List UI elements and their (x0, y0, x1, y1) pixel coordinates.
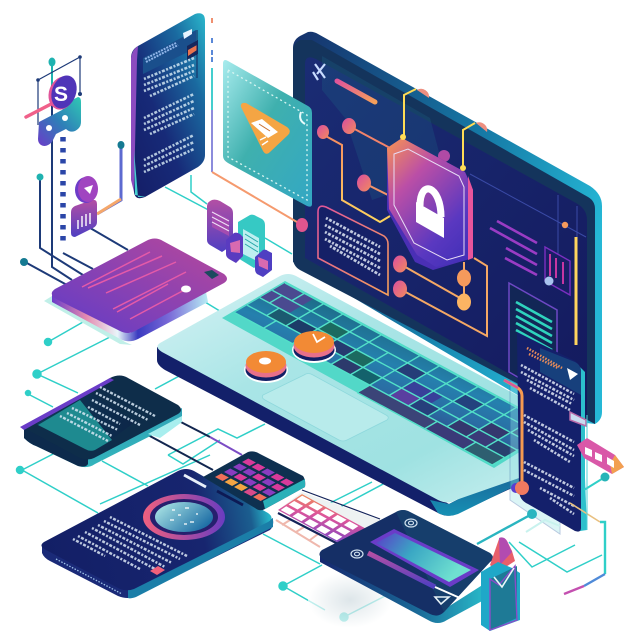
triangle icon (435, 597, 449, 604)
touchpad (262, 374, 388, 441)
wire frame (38, 57, 80, 125)
device top (319, 510, 493, 616)
calculator (203, 451, 305, 510)
device thickness (320, 553, 484, 623)
tablet text block two (144, 94, 194, 134)
top tablet (131, 13, 205, 198)
dark tablet top (24, 376, 181, 460)
document one (207, 200, 233, 252)
colour grid panel (276, 490, 380, 547)
connector lines: navy to cards (20, 65, 242, 470)
dark tablet side (24, 408, 182, 467)
phone body (517, 332, 581, 532)
purple card (44, 238, 227, 345)
base underside (157, 347, 525, 516)
phone text (527, 348, 562, 368)
purple list lines (490, 221, 537, 275)
keyboard (222, 281, 558, 468)
orange button one (244, 351, 288, 383)
speaker slit (184, 475, 206, 487)
phone side (579, 366, 587, 531)
card shadow tint (44, 296, 132, 345)
padlock icon (416, 189, 444, 238)
person icon (71, 141, 124, 237)
tablet edge (131, 13, 205, 198)
envelope triangle (241, 103, 290, 154)
right phone (504, 332, 600, 534)
right teal connectors (477, 415, 610, 594)
card top (52, 238, 227, 333)
bottom-right device (319, 510, 493, 623)
screen logo (313, 64, 325, 80)
connector dots (511, 483, 521, 493)
top-left app icon (26, 55, 82, 146)
pink bar (26, 102, 55, 117)
translucent panel (510, 380, 560, 534)
document four (255, 250, 272, 277)
device bar (368, 553, 435, 587)
orange dot on screen (562, 222, 568, 228)
document card on screen (509, 283, 557, 400)
puzzle base (38, 97, 81, 146)
card text lines (82, 252, 188, 319)
large device top (41, 469, 271, 590)
tower cone (490, 538, 515, 572)
soft shadow (308, 572, 392, 628)
tag buttons (585, 447, 614, 468)
tablet header strip (143, 30, 196, 74)
orange connector on phone (504, 380, 522, 482)
circuit dots (317, 118, 450, 298)
security tower (481, 537, 520, 631)
large device text (73, 517, 187, 569)
card dot and chip (181, 286, 191, 292)
device screen (370, 529, 479, 587)
screen bezel (293, 40, 595, 424)
dark tablet (20, 376, 182, 467)
dashed coloured connector and node (212, 18, 302, 225)
connector lines: teal network (16, 175, 602, 621)
tower body (481, 562, 520, 631)
document two (238, 215, 265, 268)
deck top (157, 274, 585, 502)
circuit nodes left (322, 126, 586, 345)
yellow circuit to shield (404, 89, 475, 168)
large device side (42, 520, 273, 598)
bars widget (544, 247, 570, 295)
round icons (351, 519, 417, 558)
upper grid (278, 494, 367, 545)
screen gloss (322, 56, 445, 200)
dark tablet text (60, 387, 155, 441)
small document stack (207, 200, 272, 277)
highlighted keys (222, 283, 555, 465)
tablet text block one (144, 58, 194, 96)
large bottom-left device (41, 469, 273, 598)
card thickness (52, 292, 208, 341)
orange button two (292, 331, 336, 363)
S badge: S (54, 83, 68, 106)
glass card (223, 60, 312, 207)
purple edge (20, 378, 114, 430)
screen outer shell (293, 32, 602, 424)
calculator keys (215, 458, 294, 501)
dotted vertical line (60, 137, 66, 247)
laptop base (157, 274, 585, 516)
menu pill (337, 81, 375, 102)
tablet text block three (144, 135, 194, 172)
lens ring (143, 494, 225, 540)
screen display (305, 57, 587, 418)
screen text panel (318, 206, 388, 295)
security shield with padlock (387, 134, 473, 270)
pink circuit dot (296, 218, 308, 232)
pink tag (577, 438, 624, 474)
document three (226, 233, 243, 263)
dark tablet screen (36, 393, 135, 450)
laptop screen (293, 32, 602, 424)
red key (150, 566, 165, 575)
pink half dots behind screen (417, 89, 487, 132)
lower reflected grid (276, 520, 320, 547)
